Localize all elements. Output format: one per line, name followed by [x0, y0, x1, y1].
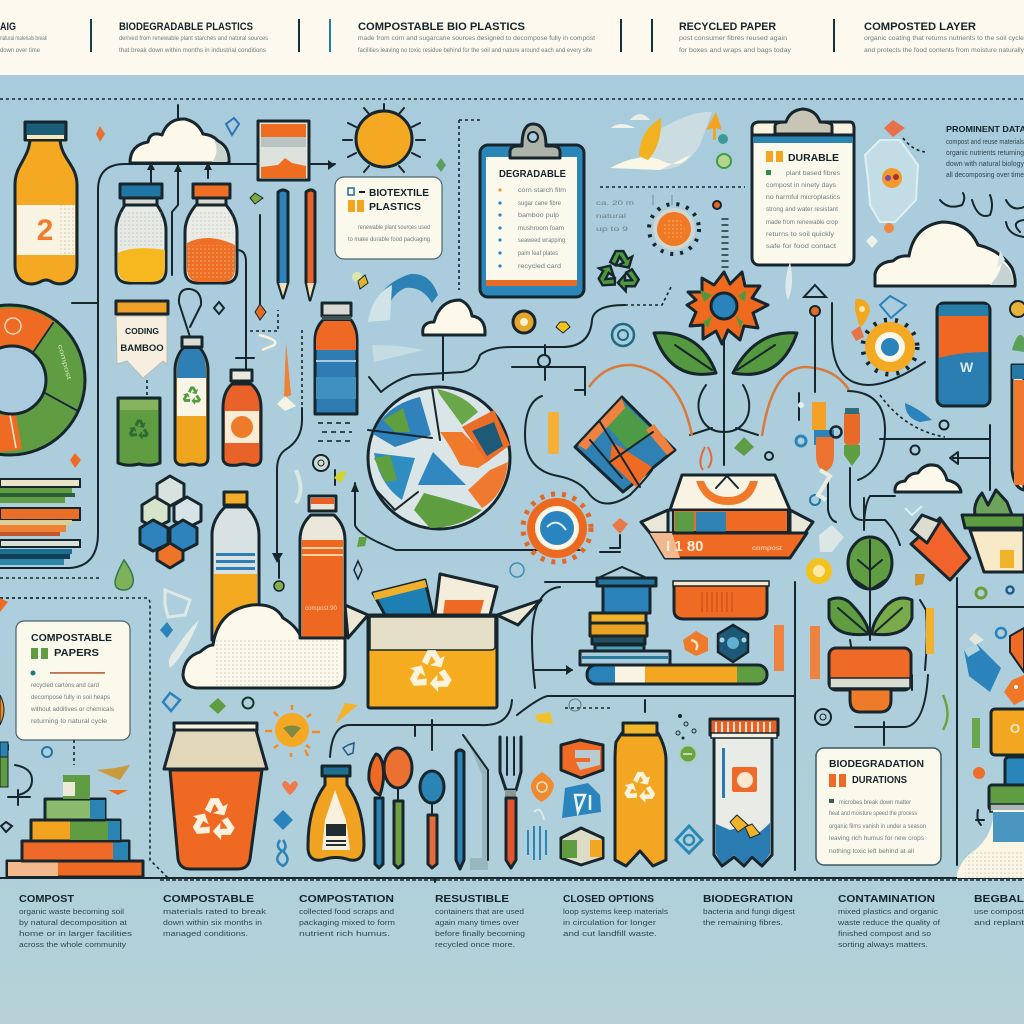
swoosh: blue arc	[352, 272, 438, 362]
callout card: biodegradable plastics: renewable plant sources used	[358, 224, 430, 231]
bottle: orange with label	[223, 370, 261, 465]
header band	[0, 0, 1024, 75]
right column: package stack	[957, 586, 1024, 878]
swoosh: folded paper	[610, 112, 731, 170]
sun: orange with dotted ring	[649, 201, 721, 254]
footer column 7: CONTAMINATION	[838, 894, 935, 905]
footer column 4: RESUSTIBLE	[435, 894, 509, 905]
clipboard: materials: compost in ninety days	[766, 182, 837, 189]
stacked bars: left	[0, 479, 80, 565]
bottle: orange tall: compost 90	[305, 605, 337, 612]
footer column 8	[974, 894, 1024, 927]
progress bar	[587, 665, 767, 684]
hexagon cluster	[140, 476, 201, 568]
footer column 3	[299, 894, 395, 938]
bottle: yellow with recycling	[615, 723, 666, 866]
donut chart	[0, 305, 85, 455]
footer column 1: home or in larger facilities	[19, 931, 133, 938]
footer column 3: collected food scraps and	[299, 909, 394, 916]
cloud: small middle	[423, 300, 485, 380]
footer column 4: containers that are used	[435, 909, 524, 916]
footer column 7: finished compost and so	[838, 931, 931, 938]
header item: recycled paper: RECYCLED PAPER	[679, 21, 776, 33]
arrow: top	[328, 160, 335, 170]
header item: biodegradable plastics: derived from renewable plant starches and natural sources	[119, 35, 269, 42]
clipboard: biodegradable list	[459, 120, 584, 297]
pencil: blue	[278, 190, 288, 298]
callout card: compostable papers: COMPOSTABLE	[31, 633, 112, 644]
small sun: bottom center	[265, 703, 358, 757]
dashed text fragments: up to 9	[596, 226, 629, 233]
footer column 6: the remaining fibres.	[703, 920, 783, 927]
spoon: blue	[420, 771, 444, 868]
footer column 7	[837, 894, 940, 949]
clipboard: biodegradable list: recycled card	[518, 263, 561, 270]
right column: package stack: O	[1010, 721, 1020, 736]
callout card: compostable papers	[16, 621, 130, 765]
hexagon: blue network	[683, 625, 748, 662]
callout card: compostable papers: decompose fully in soil heaps	[31, 694, 111, 701]
small green mark	[815, 695, 948, 730]
spoon: large orange	[384, 748, 412, 868]
header item: compostable plastics	[358, 21, 595, 54]
clipboard: materials: made from renewable crop	[766, 219, 838, 226]
footer column 3: packaging mixed to form	[299, 920, 395, 927]
vertical tags: orange	[548, 412, 934, 679]
bottle: sauce with label	[308, 766, 364, 860]
small icons: bucket side	[1, 743, 354, 866]
footer column 1	[19, 894, 133, 949]
orange tick marker	[259, 335, 296, 411]
footer column 6	[703, 894, 795, 927]
header item: biodegradable plastics: that break down within months in industrial conditions	[119, 47, 267, 54]
header item: recycled paper	[679, 21, 792, 54]
callout card: biodegradable plastics: BIOTEXTILE	[369, 188, 429, 199]
clipboard: materials: plant based fibres	[786, 170, 841, 177]
header item: composted layer: COMPOSTED LAYER	[864, 21, 976, 33]
footer column 7: waste reduce the quality of	[837, 920, 940, 927]
clipboard: biodegradable list: seaweed wrapping	[518, 237, 565, 244]
white leaf accents	[96, 114, 1005, 500]
callout card: biodegradation materials: leaving rich humus for new crops	[829, 835, 925, 842]
cloud: large right	[875, 222, 1015, 286]
banner tag: eco bamboo	[116, 301, 168, 397]
marks: center left small	[70, 453, 367, 591]
connector loop icon	[179, 289, 266, 337]
text block: top right: PROMINENT DATA	[946, 124, 1024, 134]
text block: top right: down with natural biology	[946, 161, 1024, 168]
icon column: package cubes	[528, 740, 603, 865]
callout card: biodegradable plastics: to make durable food packaging	[348, 236, 430, 243]
footer column 5: CLOSED OPTIONS	[563, 894, 654, 905]
footer column 4: again many times over	[435, 920, 520, 927]
cloud: top left	[130, 119, 229, 163]
clipboard: biodegradable list: mushroom foam	[518, 225, 564, 232]
footer column 5: loop systems keep materials	[563, 909, 669, 916]
plant pot: right	[962, 490, 1024, 572]
small cloud: lower right	[895, 465, 961, 492]
small cluster: mid right	[700, 403, 948, 586]
callout card: biodegradation materials: microbes break down matter	[839, 799, 912, 806]
stacked books: blue column	[580, 567, 670, 665]
stacked boxes: bottom left	[7, 745, 143, 877]
footer column 8: use compost	[974, 909, 1024, 916]
clipboard: materials: returns to soil quickly	[766, 231, 835, 238]
callout card: biodegradation materials: heat and moisture speed the process	[829, 810, 918, 817]
header item: partial left: down over time	[0, 47, 40, 54]
footer column 1: across the whole community	[19, 942, 127, 949]
header item: partial left: AIG	[0, 21, 16, 33]
donut chart: compost	[56, 344, 72, 381]
water drop: green	[0, 560, 133, 598]
cutlery: spoons, knife and fork	[369, 735, 521, 870]
footer column 2: materials rated to break	[163, 909, 267, 916]
open food box: centre: compost	[752, 545, 782, 552]
footer column 1: COMPOST	[19, 894, 74, 905]
callout card: biodegradation materials: DURATIONS	[852, 775, 907, 786]
jar: yellow granules	[116, 184, 166, 283]
callout card: compostable papers: recycled cartons and card	[31, 682, 99, 689]
jar: orange granules	[185, 184, 237, 283]
clipboard: biodegradable list: corn starch film	[518, 187, 566, 194]
callout card: compostable papers: without additives or chemicals	[30, 706, 115, 713]
footer column 6: bacteria and fungi digest	[703, 909, 795, 916]
pie chart: world regions	[368, 387, 510, 529]
footer column 2: managed conditions.	[163, 931, 248, 938]
text block: top right	[940, 124, 1024, 237]
orange arcs	[589, 365, 849, 436]
header item: biodegradable plastics: BIODEGRADABLE PLASTICS	[119, 21, 253, 33]
bottle: blue with recycling label	[175, 337, 208, 465]
footer column 1: by natural decomposition at	[19, 920, 127, 927]
bottle: white, blue and yellow	[212, 492, 259, 640]
callout card: biodegradation materials	[816, 748, 941, 865]
header item: partial left: natural materials break	[0, 35, 48, 42]
clipboard: materials: DURABLE	[788, 153, 839, 164]
cloud: large dotted	[183, 605, 345, 688]
dashed text fragments	[596, 187, 745, 272]
gear: yellow with blue eye	[863, 320, 917, 374]
small orange-blue bottles	[796, 393, 862, 522]
header item: composted layer: and protects the food contents from moisture naturally	[864, 47, 1024, 54]
box: open yellow with recycling	[345, 574, 541, 708]
open food box: centre: I 1 80	[666, 538, 704, 555]
callout card: biodegradation materials: nothing toxic left behind at all	[829, 848, 915, 855]
clipboard: biodegradable list: sugar cane fibre	[518, 200, 561, 207]
footer column 4: before finally becoming	[435, 931, 525, 938]
header item: recycled paper: post consumer fibres reused again	[679, 35, 787, 42]
small marks: by bottle	[535, 699, 702, 853]
recycling icon: green	[594, 251, 641, 294]
footer column 8: and replant	[974, 920, 1024, 927]
sun badge: orange	[510, 494, 628, 577]
connector lines	[0, 99, 1024, 882]
tag: orange packet	[905, 506, 970, 580]
header item: composted layer: organic coating that returns nutrients to the soil cycle	[864, 35, 1024, 42]
clipboard: biodegradable list: palm leaf plates	[518, 250, 559, 257]
open food box: centre	[641, 475, 813, 558]
bottle label number: 2	[37, 214, 53, 247]
header item: compostable plastics: COMPOSTABLE BIO PLASTICS	[358, 21, 525, 33]
clipboard: materials: safe for food contact	[766, 243, 836, 250]
square sample box	[258, 121, 309, 180]
knife	[456, 735, 488, 870]
dashed text fragments: ca. 20 m	[596, 200, 634, 207]
bottle: orange and blue, centre	[315, 303, 357, 441]
spoon: orange	[369, 754, 384, 868]
pencil: orange	[306, 190, 315, 300]
footer column 1: organic waste becoming soil	[19, 909, 125, 916]
can: blue and orange: W	[960, 359, 974, 375]
footer column 7: mixed plastics and organic	[838, 909, 939, 916]
clipboard: materials	[752, 109, 854, 265]
clipboard: materials: strong and water resistant	[766, 206, 838, 213]
clipboard: materials: no harmful microplastics	[766, 194, 841, 201]
header item: compostable plastics: made from corn and sugarcane sources designed to decompose fully in compost	[358, 35, 595, 42]
jar: orange cap with water	[710, 719, 778, 866]
footer column 4: recycled once more.	[435, 942, 515, 949]
droplet creature icon	[865, 120, 925, 233]
small icons: upper right cluster	[513, 285, 1024, 392]
header item: composted layer	[864, 21, 1024, 54]
can: blue and orange	[937, 303, 990, 406]
dashed text fragments: natural	[596, 213, 627, 220]
footer column 2: COMPOSTABLE	[163, 894, 254, 905]
footer column 6: BIODEGRATION	[703, 894, 793, 905]
footer column 3: COMPOSTATION	[299, 894, 394, 905]
plant stem and leaves	[654, 333, 797, 465]
callout card: compostable papers: returning to natural cycle	[31, 718, 107, 725]
left edge items	[0, 598, 8, 787]
header item: recycled paper: for boxes and wraps and bags today	[679, 47, 792, 54]
callout card: biodegradation materials: organic films vanish in under a season	[829, 823, 926, 830]
flower: orange sun bloom	[687, 272, 768, 344]
callout card: biodegradation materials: BIODEGRADATION	[829, 759, 924, 770]
bottle: orange large	[15, 122, 77, 284]
banner tag: eco bamboo: BAMBOO	[120, 343, 164, 354]
footer column 5: in circulation for longer	[563, 920, 657, 927]
footer column 4	[435, 894, 525, 949]
banner tag: eco bamboo: CODING	[125, 326, 159, 336]
bottle: orange, right edge	[1012, 365, 1024, 490]
footer column 2	[163, 894, 267, 938]
footer column 5	[563, 894, 669, 938]
bottle: orange tall	[300, 496, 345, 650]
tray: orange	[673, 581, 769, 619]
callout card: biodegradable plastics: PLASTICS	[369, 202, 421, 213]
plant: sapling in pot	[829, 537, 912, 712]
footer column 5: and cut landfill waste.	[563, 931, 657, 938]
clipboard: biodegradable list: bamboo pulp	[518, 212, 559, 219]
header item: biodegradable plastics	[119, 21, 269, 54]
diamond tile mosaic	[575, 397, 675, 492]
header item: compostable plastics: facilities leaving no toxic residue behind for the soil and nature around each and every site	[358, 47, 592, 54]
footer column 2: down within six months in	[163, 920, 262, 927]
can: green	[118, 398, 160, 465]
clipboard: biodegradable list: DEGRADABLE	[499, 169, 566, 180]
footer column 7: sorting always matters.	[838, 942, 928, 949]
callout card: compostable papers: PAPERS	[54, 648, 99, 659]
footer column 8: BEGBAL	[974, 894, 1024, 905]
fork	[500, 737, 521, 868]
small icons: dashed panel right	[160, 590, 254, 714]
bucket: orange with recycling	[164, 723, 267, 869]
sun: yellow	[343, 104, 425, 172]
header item: partial left	[0, 21, 48, 54]
callout card: biodegradable plastics	[335, 177, 442, 259]
footer column 3: nutrient rich humus.	[299, 931, 390, 938]
